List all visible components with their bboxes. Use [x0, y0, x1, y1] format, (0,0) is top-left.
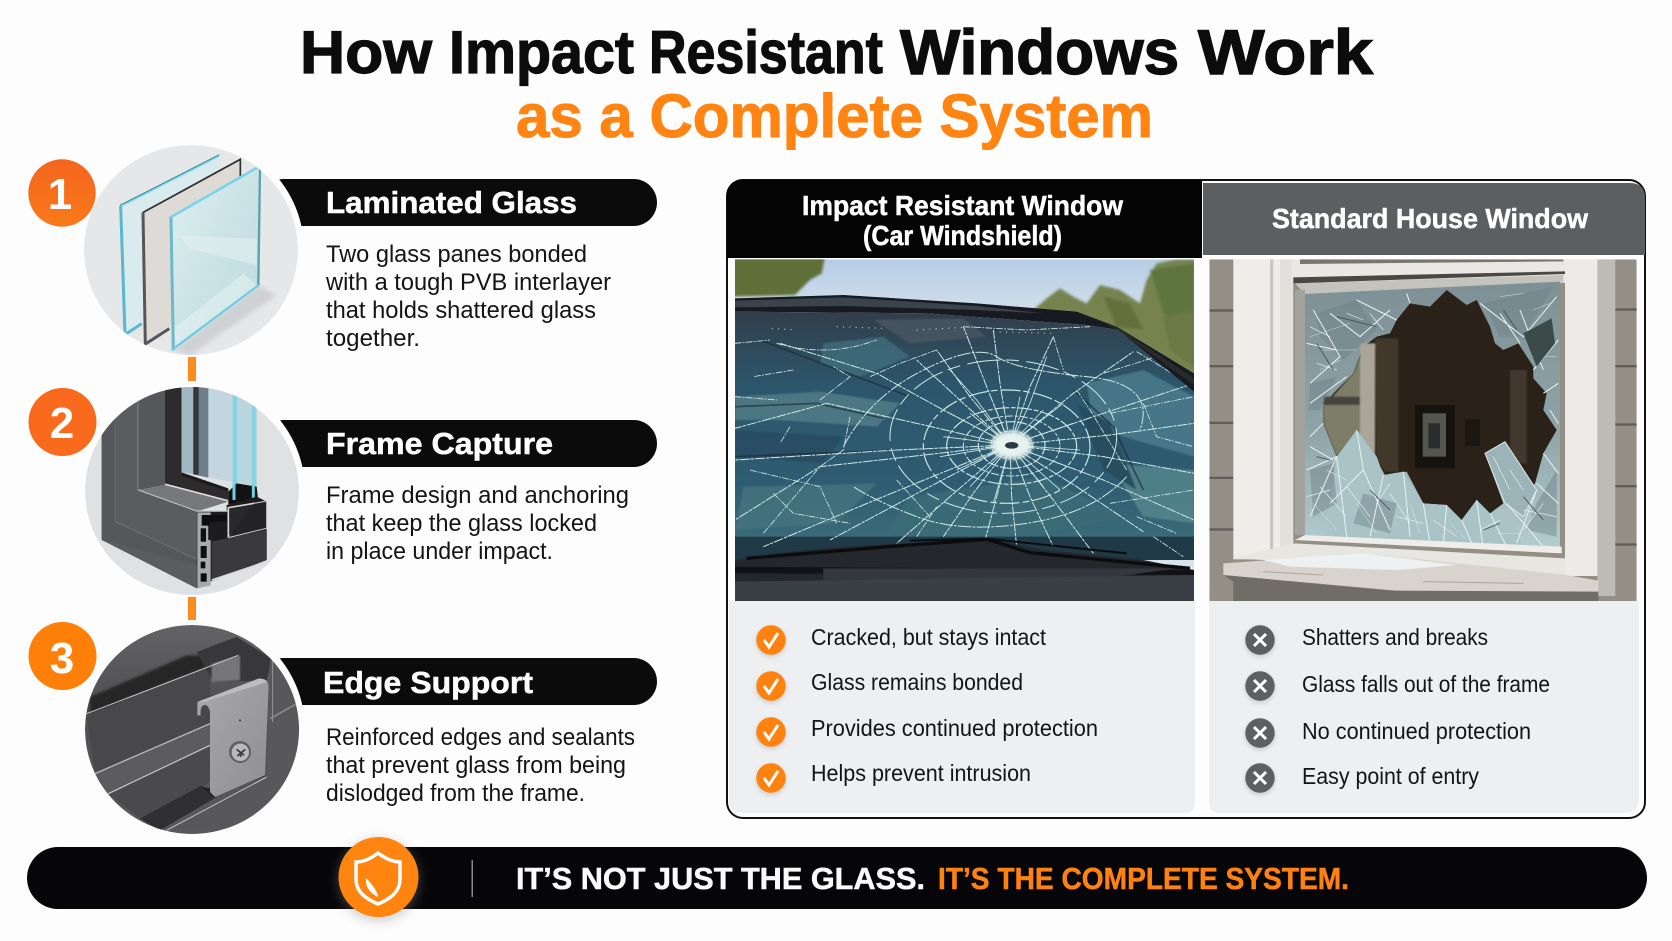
item: glass falls out of the frame: [1245, 671, 1550, 703]
number badge 1: 1: [48, 170, 72, 219]
item: helps prevent intrusion: [756, 760, 1031, 795]
title: How: [300, 19, 432, 86]
step connector 2: [188, 597, 196, 620]
title: Work: [1198, 18, 1374, 88]
callout text: IT’S NOT JUST THE GLASS.: [516, 861, 925, 896]
heading bar: Laminated Glass: Laminated Glass: [326, 185, 577, 220]
list panel: impact resistant benefits: [729, 601, 1195, 813]
photo: shattered house window: [1209, 259, 1638, 602]
item: shatters and breaks: [1245, 624, 1488, 657]
title: Windows: [900, 18, 1179, 88]
heading bar: Edge Support: Edge Support: [323, 665, 533, 700]
text: laminated glass description: Two glass panes bonded: [326, 241, 587, 268]
step connector 1: [188, 357, 196, 381]
icon: laminated glass panes: [84, 145, 298, 355]
panel: step 3 edge support: [28, 616, 657, 842]
list panel: standard window drawbacks: [1209, 601, 1639, 813]
item: glass remains bonded: Glass remains bonded: [811, 669, 1023, 695]
panel: comparison table: [727, 180, 1645, 818]
text: edge support description: that prevent glass from being: [326, 752, 626, 779]
photo: cracked car windshield: [730, 257, 1200, 601]
item: easy point of entry: Easy point of entry: [1302, 763, 1479, 789]
heading bar: Edge Support: [260, 658, 657, 705]
panel: step 1 laminated glass: [28, 137, 657, 363]
text: edge support description: dislodged from the frame.: [326, 780, 585, 807]
column: impact resistant window: [727, 180, 1202, 813]
number badge 1: [28, 159, 96, 227]
heading bar: Frame Capture: [260, 420, 657, 467]
callout text: [516, 861, 1349, 896]
item: provides continued protection: Provides continued protection: [811, 715, 1098, 741]
item: easy point of entry: [1245, 763, 1479, 795]
text: frame capture description: [326, 482, 629, 565]
text: edge support description: Reinforced edges and sealants: [326, 724, 635, 751]
text: frame capture description: Frame design and anchoring: [326, 482, 629, 509]
header: impact resistant window: (Car Windshield): [863, 220, 1062, 251]
heading bar: Laminated Glass: [260, 179, 657, 226]
header: standard house window: Standard House Window: [1272, 203, 1588, 234]
item: no continued protection: [1245, 718, 1531, 750]
number badge 2: 2: [50, 399, 74, 448]
text: laminated glass description: [325, 241, 611, 352]
column: standard house window: [1203, 183, 1645, 813]
title: as a Complete System: [516, 82, 1153, 150]
icon: metal edge bracket: [85, 625, 303, 834]
text: edge support description: [326, 724, 635, 807]
item: provides continued protection: [756, 715, 1098, 749]
text: laminated glass description: with a tough PVB interlayer: [325, 269, 611, 296]
item: glass remains bonded: [756, 669, 1023, 703]
callout bar: [27, 837, 1647, 920]
number badge 2: [28, 388, 96, 456]
item: glass falls out of the frame: Glass falls out of the frame: [1302, 671, 1550, 697]
hole with interior: [1307, 287, 1558, 550]
text: frame capture description: that keep the glass locked: [326, 510, 597, 537]
number badge 3: [28, 622, 96, 690]
item: shatters and breaks: Shatters and breaks: [1302, 624, 1488, 650]
title: Impact: [449, 19, 634, 86]
header: standard house window: [1203, 183, 1645, 255]
title: Resistant: [649, 19, 883, 86]
header: impact resistant window: [727, 180, 1202, 258]
item: cracked but stays intact: [756, 624, 1047, 657]
icon: shield badge: [338, 837, 418, 920]
text: laminated glass description: that holds shattered glass: [326, 297, 596, 324]
text: frame capture description: in place under impact.: [326, 538, 553, 565]
item: helps prevent intrusion: Helps prevent intrusion: [811, 760, 1031, 786]
item: cracked but stays intact: Cracked, but stays intact: [811, 624, 1047, 650]
header: impact resistant window: Impact Resistant Window: [802, 190, 1123, 221]
cracks: long dark secondary: [735, 340, 1143, 490]
title: [300, 18, 1374, 150]
item: no continued protection: No continued protection: [1302, 718, 1531, 744]
heading bar: Frame Capture: Frame Capture: [326, 426, 553, 461]
panel: step 2 frame capture: [28, 378, 657, 604]
callout text: IT’S THE COMPLETE SYSTEM.: [938, 861, 1349, 896]
number badge 3: 3: [50, 634, 74, 683]
text: laminated glass description: together.: [326, 325, 420, 352]
icon: window frame cross-section: [85, 385, 299, 595]
